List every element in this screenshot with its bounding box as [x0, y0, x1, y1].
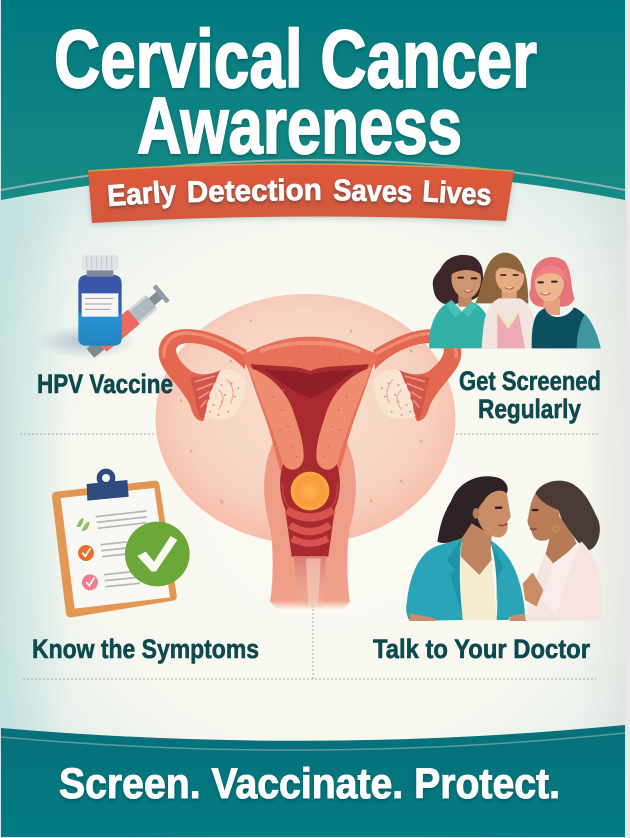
patient	[406, 476, 526, 621]
title	[54, 14, 537, 170]
banner text: Detection	[187, 174, 322, 209]
banner text: Lives	[422, 175, 492, 212]
icon: patient and doctor	[406, 476, 602, 621]
banner: early detection	[88, 164, 514, 225]
icon: clipboard checklist	[52, 471, 190, 617]
uterine walls	[248, 367, 304, 470]
syringe	[84, 284, 170, 361]
footer slogan: Screen. Vaccinate. Protect.	[59, 760, 560, 808]
icon: three women	[429, 253, 601, 348]
icon: uterus anatomy	[159, 329, 461, 610]
clip	[87, 471, 129, 501]
label: Get Screened Regularly	[459, 366, 601, 424]
fallopian tubes and ovaries	[159, 329, 247, 421]
title: Awareness	[137, 81, 462, 170]
label: Know the Symptoms: Know the Symptoms	[32, 634, 259, 664]
lower canal	[294, 556, 326, 607]
cervical folds	[283, 483, 337, 543]
icon: vaccine vial and syringe	[37, 255, 170, 361]
uterine cavity	[251, 364, 369, 557]
label: Get Screened Regularly: Regularly	[478, 394, 581, 424]
list marks	[77, 518, 98, 590]
banner text: Saves	[333, 174, 413, 209]
uterus body	[242, 337, 378, 470]
banner text: Early	[106, 175, 178, 213]
vaginal canal	[264, 440, 356, 610]
panel: footer band	[1, 725, 625, 837]
banner text	[106, 174, 492, 213]
woman two	[475, 253, 535, 348]
panel: header band	[1, 0, 625, 200]
doctor	[523, 481, 602, 621]
dashed dividers	[20, 434, 598, 679]
list lines	[96, 511, 147, 587]
label: Get Screened Regularly: Get Screened	[459, 366, 601, 396]
tumour	[291, 472, 329, 510]
icon: peach circle backdrop	[156, 294, 456, 544]
label: HPV Vaccine: HPV Vaccine	[37, 369, 173, 399]
label: Talk to Your Doctor: Talk to Your Doctor	[373, 634, 590, 664]
woman one	[429, 255, 495, 348]
green check badge	[125, 522, 190, 586]
woman three	[529, 257, 601, 348]
